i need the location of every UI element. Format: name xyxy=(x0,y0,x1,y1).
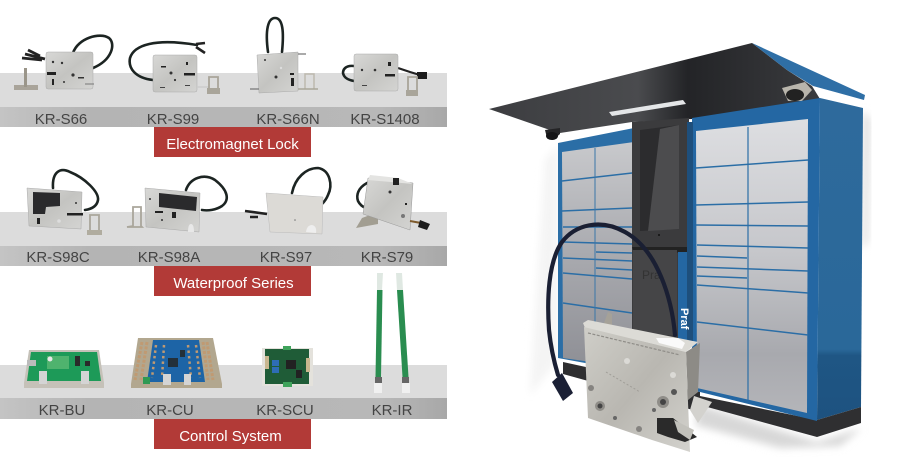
lock KR-S79 xyxy=(356,175,430,230)
locker right side xyxy=(817,98,863,420)
badge: waterproof series xyxy=(154,266,311,296)
sensor KR-IR xyxy=(374,273,410,393)
model labels row 1: KR-S99 xyxy=(147,111,199,128)
board KR-BU xyxy=(24,350,104,388)
lock KR-S66 xyxy=(14,36,112,90)
model labels row 1: KR-S1408 xyxy=(350,111,420,128)
lock body xyxy=(583,320,712,452)
lock KR-S66N xyxy=(250,18,318,93)
model labels row 3: KR-BU xyxy=(39,402,85,419)
model labels row 2: KR-S98A xyxy=(138,249,200,266)
badge: waterproof series: Waterproof Series xyxy=(173,275,294,292)
board KR-SCU xyxy=(262,346,313,387)
model labels row 1: KR-S66 xyxy=(35,111,87,128)
kiosk centre column: Pra xyxy=(642,268,661,282)
shelf 2 xyxy=(0,212,447,266)
model labels row 3: KR-SCU xyxy=(256,402,314,419)
panel: control system row xyxy=(0,273,447,449)
model labels row 3: KR-IR xyxy=(372,402,413,419)
locker left base xyxy=(563,362,700,412)
panel: electromagnet lock row xyxy=(0,18,447,157)
lock KR-S98C xyxy=(27,170,102,235)
shelf 1 xyxy=(0,73,447,127)
connector xyxy=(552,373,573,401)
locker left doors xyxy=(562,142,634,368)
lock KR-S1408 xyxy=(343,54,427,96)
model labels row 1 xyxy=(35,111,420,128)
shelf 3 xyxy=(0,365,447,419)
camera right xyxy=(782,82,812,101)
model labels row 2: KR-S98C xyxy=(26,249,90,266)
lock KR-S97 xyxy=(245,168,330,234)
lock KR-S98A xyxy=(127,177,227,232)
roof xyxy=(489,43,865,133)
model labels row 3: KR-CU xyxy=(146,402,194,419)
model labels row 2 xyxy=(26,249,413,266)
lock KR-S99 xyxy=(130,42,220,94)
stud xyxy=(604,312,612,328)
badge: control system xyxy=(154,419,311,449)
board KR-CU xyxy=(131,338,222,388)
kiosk centre column: Praf xyxy=(678,308,690,330)
model labels row 1: KR-S66N xyxy=(256,111,320,128)
panel: waterproof series row xyxy=(0,168,447,296)
model labels row 2: KR-S97 xyxy=(260,249,312,266)
badge: control system: Control System xyxy=(179,428,282,445)
locker right front xyxy=(692,98,820,421)
badge: electromagnet lock xyxy=(154,127,311,157)
model labels row 3 xyxy=(39,402,413,419)
camera left xyxy=(545,128,560,140)
cable xyxy=(548,225,675,375)
model labels row 2: KR-S79 xyxy=(361,249,413,266)
roof light xyxy=(609,100,686,116)
locker right doors xyxy=(696,119,808,413)
locker left blue frame xyxy=(558,128,634,372)
locker right base xyxy=(700,396,861,437)
kiosk centre column xyxy=(632,118,693,345)
badge: electromagnet lock: Electromagnet Lock xyxy=(166,136,299,153)
illustration: parcel locker xyxy=(489,43,870,452)
